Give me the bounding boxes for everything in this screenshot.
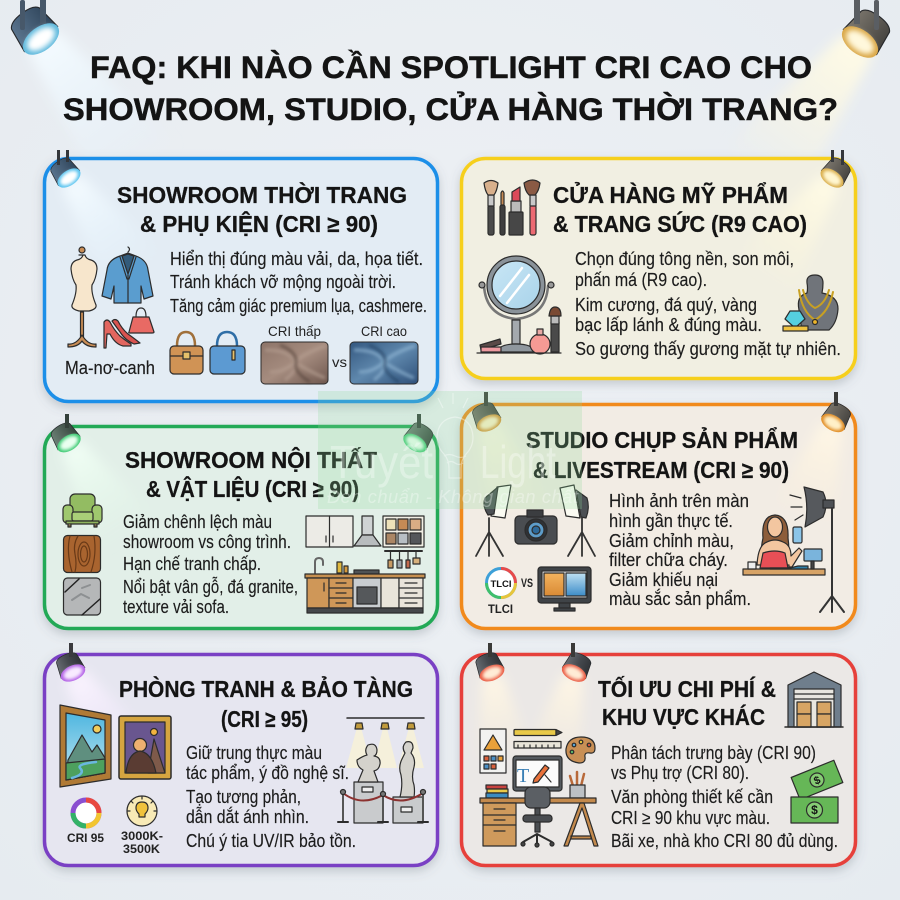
icon: warehouse [785,672,843,727]
panel 2 text: phấn má (R9 cao). [575,270,707,290]
illustration: designer desk [480,729,598,847]
panel 3 text: showroom vs công trình. [123,532,291,552]
watermark wordmark: Light [480,436,556,488]
panel 4 heading: & LIVESTREAM (CRI ≥ 90) [533,457,789,483]
panel 4 right spotlight [818,392,854,436]
panel 4 frame [462,404,856,628]
ruler [514,742,561,748]
panel 5 heading: (CRI ≥ 95) [221,706,308,732]
label: 3000K-3500K [121,831,163,856]
panel 2 text: Chọn đúng tông nền, son môi, [575,249,794,269]
icon: portrait painting [119,716,171,779]
panel 4 text: Giảm chỉnh màu, [609,531,734,551]
icon: blue bag [210,332,245,374]
icon: softbox left [476,485,511,556]
icon: TLCI badge: TLCI [490,579,512,590]
icon: mirror with cosmetics [477,256,561,354]
fabric swatch: high CRI [350,342,418,384]
monitor: T [517,765,529,787]
icon: makeup set [484,180,540,235]
panel: phòng tranh và bảo tàng [44,643,438,866]
office chair [521,787,554,847]
panel 3 beam [42,428,156,554]
panel 3 text: Giảm chênh lệch màu [123,512,272,532]
panel: showroom thời trang [43,150,437,402]
panel: tối ưu chi phí [462,643,856,866]
icon: camera [515,510,557,544]
woman [757,515,802,568]
panel 6 text [611,743,838,851]
label: 3000K-3500K: 3500K [123,844,161,856]
panel 2 heading: & TRANG SỨC (R9 CAO) [553,210,807,237]
panel 2 frame [462,158,856,378]
panel 3 text [123,512,298,617]
icon: jacket [102,247,153,303]
range hood [354,516,381,546]
spotlight: top left [5,0,65,61]
panel 5 heading: PHÒNG TRANH & BẢO TÀNG [119,674,413,702]
panel 4 text: Hình ảnh trên màn [609,491,749,511]
icon: TLCI badge [486,568,516,598]
icon: brown bag [170,332,203,374]
panel 5 text [186,743,356,851]
books [486,785,508,798]
panel 3 heading [125,446,377,502]
icon: monitor [538,567,591,611]
icon: CRI wheel [73,800,99,826]
panel 1 frame [44,158,438,402]
panel 6 heading: TỐI ƯU CHI PHÍ & [598,675,776,702]
label: Ma-nơ-canh: Ma-nơ-canh [65,358,155,378]
panel 1 heading [117,181,407,237]
panel 2 text: bạc lấp lánh & đúng màu. [575,315,762,335]
panel 6 text: Phân tách trưng bày (CRI 90) [611,743,816,763]
fabric swatch: low CRI [261,342,328,384]
panel: studio chụp sản phẩm [459,392,863,628]
icon: softbox right [560,485,595,556]
panel 2 beam [735,161,858,296]
panel 1 text: Hiển thị đúng màu vải, da, họa tiết. [170,249,423,269]
kitchen cabinets [306,516,353,547]
watermark wordmark: Đèn chuẩn - Không gian chất [327,487,579,507]
pencil [514,730,562,736]
desk [480,798,598,846]
icon: banknotes: $ [811,803,818,817]
icon: heels [104,320,140,348]
panel 3 heading: SHOWROOM NỘI THẤT [125,446,377,473]
panel 1 heading: SHOWROOM THỜI TRANG [117,181,407,208]
panel 1 heading: & PHỤ KIỆN (CRI ≥ 90) [140,210,378,237]
panel 2 text: So gương thấy gương mặt tự nhiên. [575,339,841,359]
panel 5 text: tác phẩm, ý đồ nghệ sĩ. [186,763,349,783]
title: SHOWROOM, STUDIO, CỬA HÀNG THỜI TRANG? [63,91,838,127]
track and lamps [346,718,424,768]
panel 6 right spotlight [559,643,594,685]
panel 5 spotlight [53,643,88,685]
icon: granite swatch [64,578,100,615]
icon: banknotes [791,760,843,823]
label: vs: vs [332,354,347,370]
panel 5 text: dẫn dắt ánh nhìn. [186,806,309,827]
label: VS: VS [521,578,533,590]
panel 3 left spotlight [47,414,84,456]
panel 6 left spotlight [472,643,507,685]
illustration: livestreamer [743,487,844,612]
panel 4 text: hình gần thực tế. [609,511,733,531]
rope barrier [338,790,428,822]
watermark bulb [437,393,473,478]
panel 5 text: Tạo tương phản, [186,787,301,807]
hanging utensils [385,551,422,568]
panel 4 left spotlight [469,392,504,435]
label: CRI thấp: CRI thấp [268,323,321,339]
panel 1 beam [43,161,166,296]
panel 5 beam [46,658,157,780]
label: CRI 95: CRI 95 [67,833,105,845]
watermark tint block [318,391,582,509]
studio light [790,487,844,612]
icon: banknotes: $ [812,774,822,788]
panel 6 text: Bãi xe, nhà kho CRI 80 đủ dùng. [611,831,838,851]
panel 2 text: Kim cương, đá quý, vàng [575,295,757,315]
panel 2 text [575,249,841,359]
watermark wordmark [327,436,579,507]
illustration: kitchen [305,516,425,613]
panel 1 text [170,249,427,316]
label: TLCI: TLCI [488,604,513,616]
panel 6 left beam [465,672,532,766]
title: FAQ: KHI NÀO CẦN SPOTLIGHT CRI CAO CHO [90,49,812,85]
panel 4 text: màu sắc sản phẩm. [609,588,751,609]
corner beam right [722,17,894,205]
panel 2 heading: CỬA HÀNG MỸ PHẨM [553,180,788,208]
desk [743,562,825,575]
panel 1 spotlight [47,150,84,192]
icon: landscape painting [60,705,111,787]
panel 3 text: Nổi bật vân gỗ, đá granite, [123,576,298,597]
label: CRI cao: CRI cao [361,323,407,339]
icon: wood swatch [64,536,100,572]
icon: red handbag [129,308,154,333]
panel 1 text: Tăng cảm giác premium lụa, cashmere. [170,296,427,316]
panel 2 heading [553,180,807,237]
panel 4 text [609,491,751,609]
bust on pedestal [354,744,383,823]
poster [480,729,506,773]
paint palette [566,737,595,763]
title [63,49,838,127]
panel 5 text: Giữ trung thực màu [186,743,322,763]
spotlight: top right [836,0,896,64]
panel 6 right beam [525,669,600,767]
color samples [383,516,424,547]
faucet and bottles [315,558,379,574]
panel 6 text: Văn phòng thiết kế cần [611,787,773,807]
icon: warm bulb [127,796,157,826]
panel 3 text: Hạn chế tranh chấp. [123,554,261,574]
watermark wordmark: Tuyết [330,436,433,488]
phone camera [804,549,822,569]
panel 4 text: Giảm khiếu nại [609,570,718,590]
panel 6 heading: KHU VỰC KHÁC [602,703,765,730]
panel 3 right spotlight [400,414,437,456]
panel 3 text: texture vải sofa. [123,597,229,617]
statue on pedestal [393,742,423,823]
panel 2 spotlight [817,150,854,192]
watermark [318,391,582,509]
panel 5 text: Chú ý tia UV/IR bảo tồn. [186,831,356,851]
icon: armchair [63,494,102,527]
panel: showroom nội thất [42,414,437,628]
panel 6 heading [598,675,776,730]
panel 4 heading: STUDIO CHỤP SẢN PHẨM [526,425,798,453]
panel 4 text: filter chữa cháy. [609,550,728,570]
illustration: museum [338,718,428,823]
panel 4 right beam [772,416,863,528]
label: 3000K-3500K: 3000K- [121,831,163,843]
panel 6 text: CRI ≥ 90 khu vực màu. [611,808,770,828]
icon: mannequin [68,247,97,347]
panel 4 heading [526,425,798,483]
pen cup [570,772,585,798]
panel 6 frame [462,654,856,866]
panel 5 heading [119,674,413,732]
panel 3 frame [44,426,438,628]
icon: necklace bust [783,275,838,331]
panel 1 text: Tránh khách vỡ mộng ngoài trời. [170,272,396,292]
panel 6 text: vs Phụ trợ (CRI 80). [611,763,749,783]
corner beam left [7,14,179,202]
panel 5 frame [44,654,438,866]
panel 3 heading: & VẬT LIỆU (CRI ≥ 90) [146,475,359,502]
panel: cửa hàng mỹ phẩm [462,150,858,378]
panel 4 left beam [459,416,550,528]
counter and cabinets [305,574,425,613]
